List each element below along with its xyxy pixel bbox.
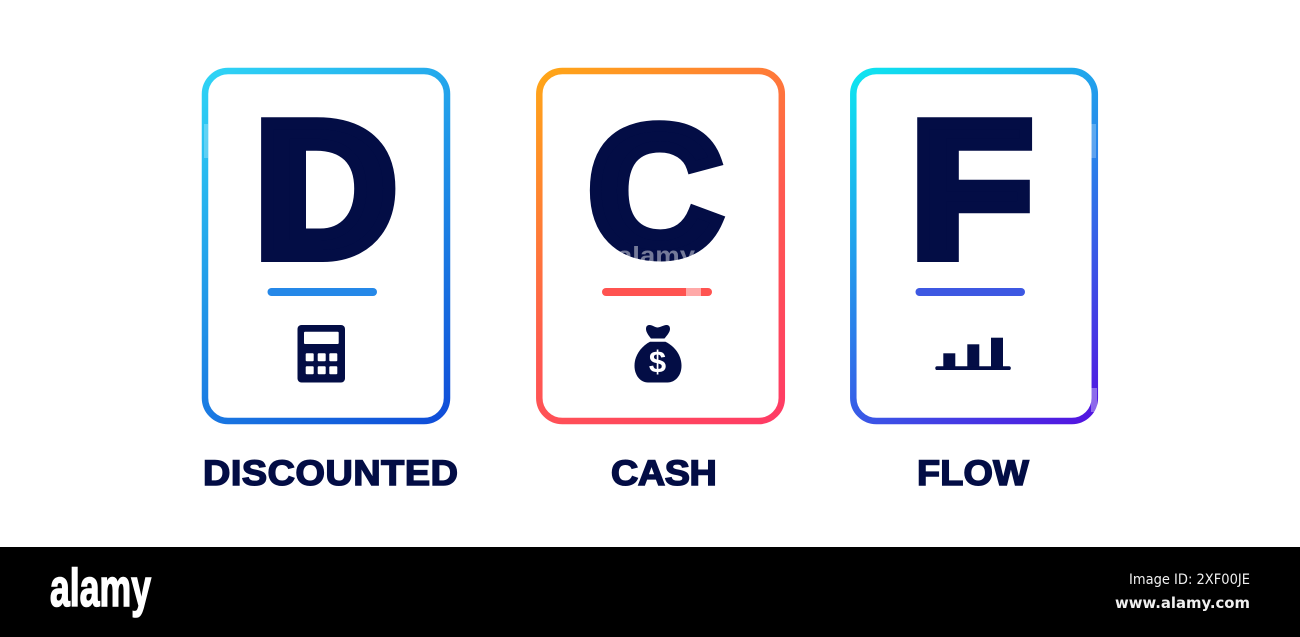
website url: www.alamy.com [1115, 594, 1250, 612]
card border F [853, 71, 1095, 421]
icon: calculator [298, 325, 345, 382]
panel: F card [853, 71, 1095, 421]
letter F: F [910, 81, 1033, 297]
watermark fragments [204, 124, 1097, 412]
letter C: C [588, 89, 723, 294]
dollar sign: $ [649, 344, 666, 379]
alamy logo: alamy [50, 559, 151, 618]
icon: bar chart [935, 338, 1011, 370]
card border C [539, 71, 782, 421]
icon: money bag [634, 325, 682, 382]
footer band [0, 547, 1300, 637]
panel: D card [205, 71, 447, 421]
panel: C card [539, 71, 782, 421]
underline D [268, 288, 377, 296]
label: CASH: CASH [611, 453, 717, 493]
label: FLOW: FLOW [917, 453, 1029, 493]
image id: Image ID: 2XF00JE [1129, 572, 1250, 588]
label: DISCOUNTED: DISCOUNTED [203, 453, 458, 493]
card border D [205, 71, 447, 421]
underline C [602, 288, 712, 296]
underline F [916, 288, 1025, 296]
letter D: D [254, 82, 398, 297]
watermark fragments: alamy [617, 242, 695, 270]
